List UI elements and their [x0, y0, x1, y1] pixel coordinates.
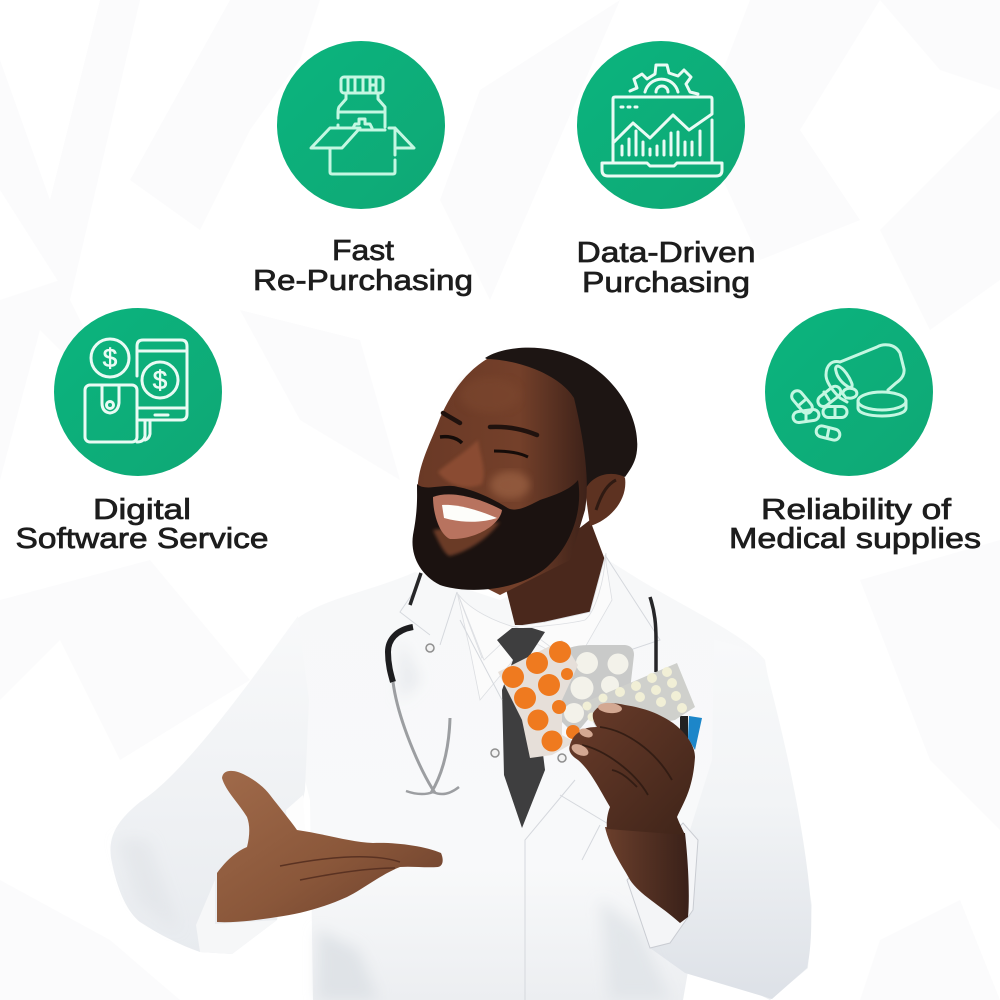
head	[412, 348, 637, 595]
right cuff	[627, 823, 698, 948]
mouth	[433, 494, 502, 539]
forehead highlight	[460, 377, 520, 413]
coat buttons	[426, 644, 566, 762]
icon: digital software service	[54, 308, 222, 476]
eyes	[440, 437, 462, 443]
coat shading	[118, 640, 670, 1000]
left sleeve	[110, 616, 309, 954]
icon: fast re-purchasing	[277, 41, 445, 209]
coat body	[298, 555, 812, 1000]
neck	[505, 520, 605, 625]
shirt collar	[457, 553, 612, 700]
cheek highlight	[490, 471, 530, 499]
icon: reliability of medical supplies	[765, 308, 933, 476]
teeth	[442, 505, 497, 522]
doctor figure	[110, 348, 812, 1000]
ear inner	[596, 480, 616, 510]
left cuff	[196, 880, 277, 954]
icon: digital software service: $	[153, 365, 168, 395]
face	[418, 359, 587, 595]
heading line: purchasing: Purchasing	[582, 267, 750, 299]
finger nails	[570, 702, 622, 758]
heading line: medical supplies: Medical supplies	[729, 523, 981, 555]
hair	[485, 348, 637, 490]
right sleeve	[650, 640, 811, 999]
right hand	[569, 703, 695, 835]
right forearm	[605, 827, 689, 923]
eyebrows	[443, 413, 537, 435]
left hand	[217, 771, 443, 922]
left finger lines	[280, 857, 400, 880]
fingers	[582, 727, 672, 795]
blister pack: white pills	[560, 645, 634, 735]
pen	[680, 716, 702, 750]
heading: fast re-purchasing: Fast	[332, 235, 394, 267]
beard	[412, 480, 579, 590]
arm gap	[286, 795, 309, 890]
stethoscope	[388, 573, 656, 794]
ear	[585, 469, 625, 526]
tie	[497, 628, 545, 828]
icon: digital software service: $	[103, 343, 118, 373]
heading line: software service: Software Service	[16, 523, 268, 555]
heading: reliability of: Reliability of	[761, 494, 952, 526]
heading: digital: Digital	[93, 494, 191, 526]
blister pack: orange pills	[498, 640, 580, 758]
heading: data-driven: Data-Driven	[576, 237, 756, 269]
icon: data-driven purchasing	[577, 41, 745, 209]
chin patch	[433, 522, 500, 556]
coat lapels	[400, 555, 660, 1000]
heading line: re-purchasing: Re-Purchasing	[253, 265, 473, 297]
nose	[438, 440, 484, 487]
blister pack: small pills	[582, 663, 695, 735]
